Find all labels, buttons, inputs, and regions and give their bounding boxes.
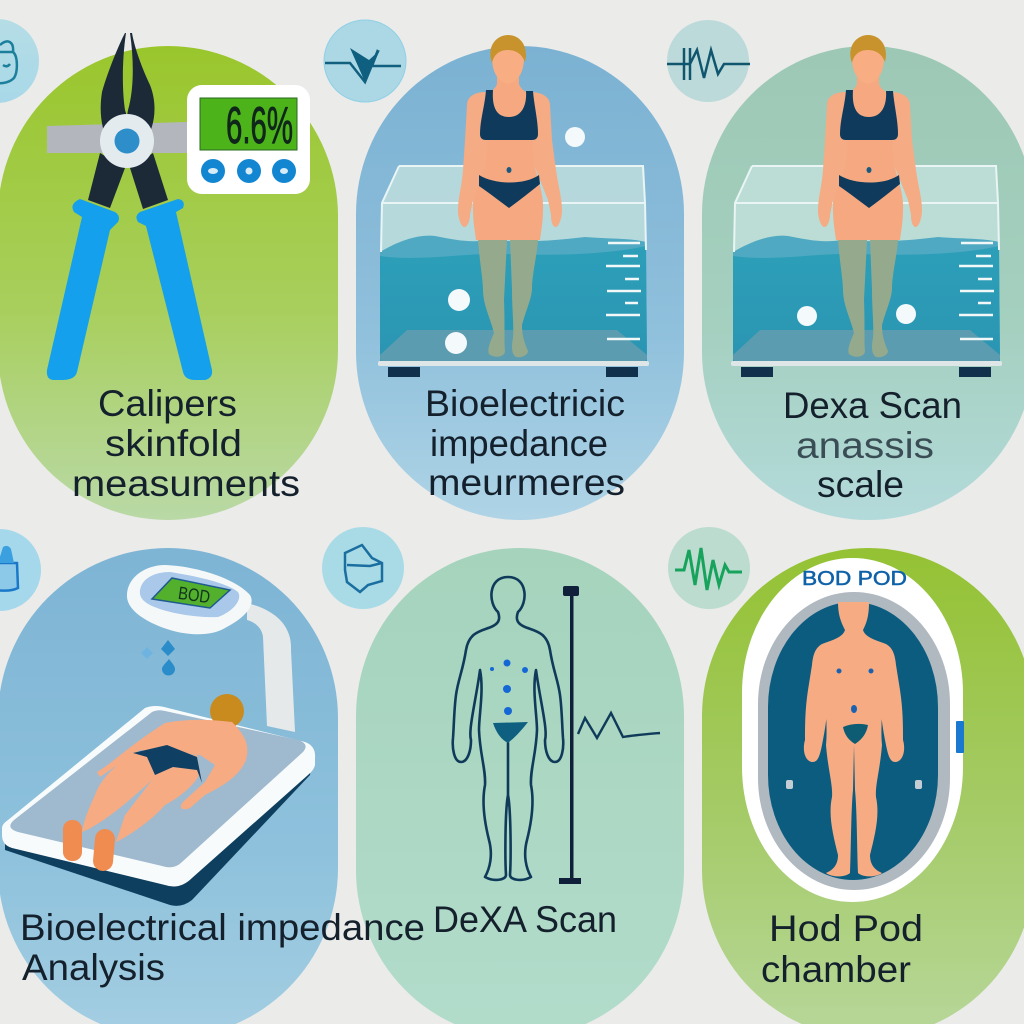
caption: calipers — [72, 383, 300, 504]
measuring pole — [559, 586, 581, 884]
caption: bioelectrical impedance analysis: Analysis — [22, 947, 165, 988]
caption: bioelectric: impedance — [430, 423, 608, 464]
caption: hod pod chamber — [761, 908, 923, 990]
caption: hod pod chamber: chamber — [761, 949, 911, 990]
panel background: blue — [356, 46, 684, 520]
water droplets — [141, 640, 175, 676]
caption: dexa scale: Dexa Scan — [783, 385, 962, 426]
pod chamber — [742, 558, 964, 902]
caption: hod pod chamber: Hod Pod — [769, 908, 923, 949]
panel background: blue — [0, 548, 338, 1024]
icon: pulse badge — [667, 20, 750, 102]
pod label: BOD POD — [802, 568, 907, 590]
body silhouette — [804, 602, 904, 876]
icon: heartbeat badge — [324, 20, 406, 102]
icon: hexagon badge — [322, 527, 404, 609]
bubbles — [797, 304, 916, 326]
panel: hod pod chamber — [668, 527, 1024, 1024]
panel background: mint — [356, 548, 684, 1024]
scan waveform — [578, 713, 660, 738]
water tank — [378, 166, 649, 377]
sensor dots — [836, 668, 874, 713]
caption: dexa scale: scale — [817, 464, 904, 505]
caption: bioelectric: Bioelectricic — [425, 383, 625, 424]
figure lying on scale — [63, 694, 247, 872]
gray skinfold band — [47, 122, 187, 153]
scale platform — [2, 706, 315, 906]
caption: calipers: skinfold — [105, 423, 242, 464]
caption: dexa scale: anassis — [796, 425, 934, 466]
digital display — [127, 565, 252, 634]
monitor stand — [247, 603, 295, 732]
panel: dexa scan — [322, 527, 684, 1024]
caption: bioelectric — [425, 383, 625, 503]
digital readout device — [187, 85, 310, 194]
water tank — [731, 166, 1002, 377]
body outline — [453, 577, 563, 880]
caliper tool — [47, 33, 212, 380]
caption: calipers: Calipers — [98, 383, 237, 424]
panel: calipers skinfold measurements — [0, 19, 338, 520]
caption: bioelectrical impedance analysis — [20, 907, 425, 988]
panel background: green — [702, 548, 1024, 1024]
figure standing in water — [458, 35, 562, 357]
caption: bioelectrical impedance analysis: Bioelectrical impedance — [20, 907, 425, 948]
pelvis marker — [493, 722, 528, 743]
caption: dexa scan: DeXA Scan — [433, 899, 617, 940]
icon: jar badge — [0, 529, 41, 611]
bubbles — [445, 127, 585, 354]
briefs marker — [843, 724, 868, 744]
icon: padlock badge — [0, 19, 39, 103]
panel background: teal — [702, 46, 1024, 520]
display value: BOD — [177, 583, 211, 607]
measurement dots — [490, 660, 528, 715]
caption: bioelectric: meurmeres — [428, 462, 625, 503]
panel: bioelectric impedance measurements — [324, 20, 684, 520]
panel: bioelectrical impedance analysis — [0, 529, 425, 1024]
figure standing in water — [818, 35, 922, 357]
panel background: green — [0, 46, 338, 520]
caption: calipers: measuments — [72, 463, 300, 504]
icon: green waveform badge — [668, 527, 750, 609]
panel: dexa scan analysis scale — [667, 20, 1024, 520]
caption: dexa scale — [783, 385, 962, 505]
readout value: 6.6% — [226, 97, 293, 155]
